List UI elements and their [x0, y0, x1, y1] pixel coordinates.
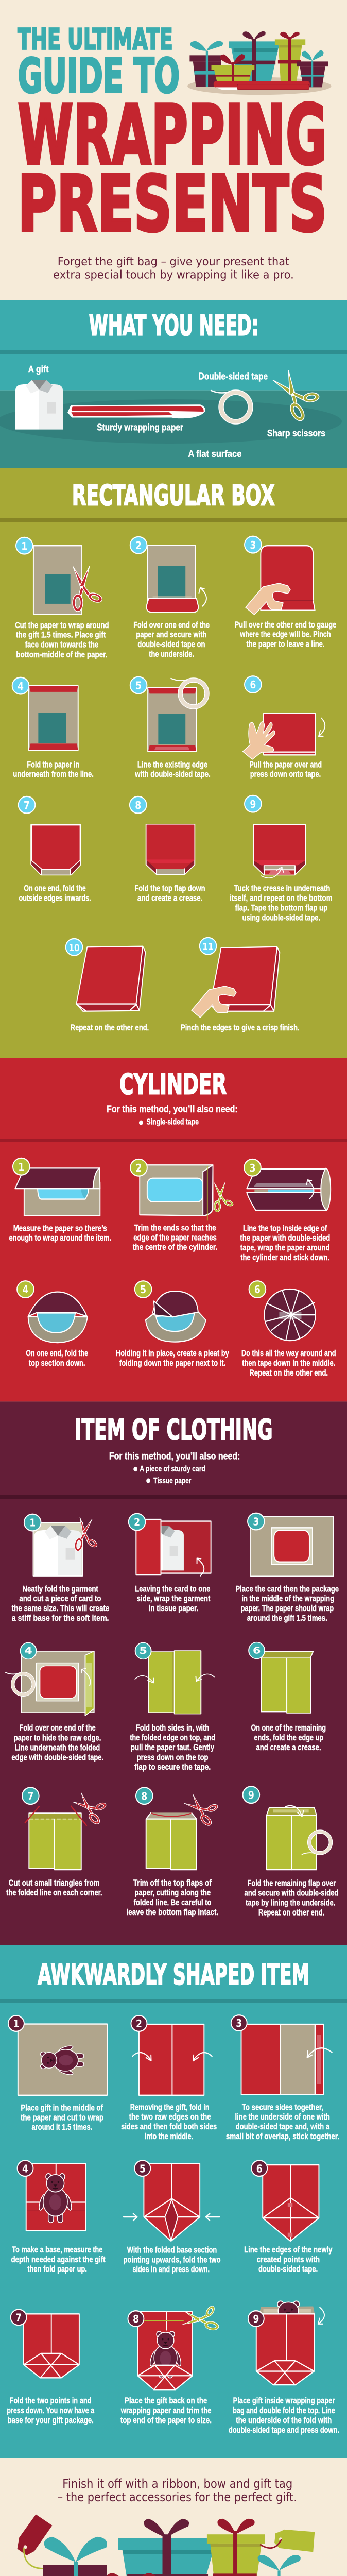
step 2: paper and secure with [136, 630, 206, 640]
closing text [58, 2476, 297, 2504]
step 4 [6, 1642, 103, 1762]
step 1: the same size. This will create [12, 1604, 109, 1613]
step 7: 7 [27, 1790, 33, 1803]
heading: item of clothing: A piece of sturdy card [140, 1464, 205, 1473]
labels: items needed: Sharp scissors [267, 428, 325, 439]
step 10 [66, 939, 149, 1032]
step 7: outside edges inwards. [19, 893, 91, 903]
intro text: extra special touch by wrapping it like a pro. [53, 268, 294, 281]
step 3: small bit of overlap, stick together. [226, 2132, 339, 2141]
step 6 [244, 2160, 333, 2274]
step 8: 8 [141, 1790, 147, 1803]
step 6: 6 [256, 2163, 263, 2175]
step 4: edge with double-sided tape. [11, 1753, 103, 1762]
step 5 [130, 677, 211, 779]
step 7: On one end, fold the [24, 884, 86, 893]
step 9: flap. Tape the bottom flap up [235, 903, 327, 913]
heading: item of clothing: ITEM OF CLOTHING [75, 1414, 273, 1447]
panel: awkwardly shaped item [0, 1945, 347, 2458]
heading: cylinder: For this method, you’ll also need: [107, 1104, 238, 1115]
step 3: Pull over the other end to gauge [235, 620, 336, 630]
heading: item of clothing [75, 1414, 273, 1485]
step 1: Place gift in the middle of [21, 2103, 103, 2113]
step 5: 5 [139, 1646, 147, 1656]
step 6 [249, 1642, 326, 1752]
step 6: 6 [254, 1284, 261, 1296]
step 1: 1 [21, 540, 27, 552]
step 1: 1 [13, 2018, 19, 2030]
step 2: 2 [134, 1516, 140, 1529]
step 1: Cut the paper to wrap around [15, 621, 109, 630]
step 3: 3 [250, 539, 256, 551]
icon: scissors [272, 363, 326, 423]
step 2: in tissue paper. [149, 1604, 198, 1613]
step 2: the two raw edges on the [129, 2112, 211, 2122]
icon: wrapping paper roll [67, 404, 205, 418]
step 6 [241, 1281, 336, 1378]
step 9: Place gift inside wrapping paper [233, 2396, 335, 2405]
step 4: depth needed against the gift [11, 2255, 106, 2264]
step 5: the folded edge on top, and [130, 1733, 215, 1742]
step 2: Removing the gift, fold in [130, 2103, 210, 2112]
step 2 [130, 1159, 234, 1252]
step 4: Fold the paper in [27, 760, 79, 770]
title: THE ULTIMATE [18, 22, 173, 56]
step 8: Place the gift back on the [125, 2396, 207, 2405]
step 2: Leaving the card to one [135, 1584, 210, 1594]
step 5: pointing upwards, fold the two [123, 2255, 221, 2265]
step 5: folding down the paper next to it. [119, 1359, 225, 1368]
step 7: press down. You now have a [7, 2406, 95, 2416]
step 3: 3 [249, 1162, 255, 1174]
icon: tape [211, 390, 253, 424]
step 3: paper. The paper should wrap [241, 1604, 334, 1613]
step 9: the underside of the fold with [236, 2416, 332, 2425]
step 3: in the middle of the wrapping [241, 1594, 334, 1603]
step 4: paper to hide the raw edge. [14, 1734, 101, 1743]
heading: rectangular box: RECTANGULAR BOX [72, 480, 275, 513]
step 8: top end of the paper to size. [120, 2416, 212, 2425]
step 1: Neatly fold the garment [22, 1584, 98, 1594]
step 10: Repeat on the other end. [71, 1023, 149, 1032]
step 3: the paper to leave a line. [246, 640, 325, 649]
step 3: To secure sides together, [242, 2103, 323, 2112]
step 7: Cut out small triangles from [9, 1878, 99, 1888]
step 1: face down towards the [25, 640, 98, 650]
step 2: sides and then fold both sides [121, 2122, 217, 2131]
step 6: Pull the paper over and [249, 760, 322, 770]
step 7: the folded line on each corner. [6, 1888, 102, 1897]
step 6: Line the edges of the newly [244, 2245, 333, 2255]
step 6: ends, fold the edge up [254, 1733, 323, 1742]
step 9: Tuck the crease in underneath [234, 884, 330, 893]
step 9: tape by lining the underside. [246, 1898, 335, 1908]
step 5: 5 [135, 680, 142, 692]
step 5: Line the existing edge [137, 760, 207, 770]
title: GUIDE TO [18, 49, 180, 104]
step 7: Fold the two points in and [9, 2396, 92, 2405]
step 3 [226, 2015, 339, 2141]
step 7 [19, 796, 91, 903]
step 8 [120, 2300, 222, 2425]
step 2: the centre of the cylinder. [133, 1243, 217, 1252]
heading: cylinder: CYLINDER [119, 1069, 227, 1101]
intro text [53, 255, 294, 281]
step 5 [116, 1281, 229, 1368]
step 3: Place the card then the package [235, 1584, 339, 1594]
step 9 [229, 2301, 339, 2435]
step 7: 7 [24, 800, 30, 811]
labels: items needed: Double-sided tape [199, 371, 268, 382]
step 5 [130, 1642, 215, 1772]
step 4: then fold paper up. [27, 2265, 87, 2274]
step 4: 4 [22, 1284, 28, 1296]
step 7 [6, 1786, 113, 1897]
illustration: gifts with tags [18, 2514, 316, 2576]
step 7 [7, 2310, 95, 2425]
step 8: 8 [135, 800, 141, 811]
panel: what you need [0, 300, 347, 468]
labels: items needed [28, 364, 325, 459]
labels: items needed: A gift [28, 364, 49, 375]
closing text: – the perfect accessories for the perfect gift. [58, 2489, 297, 2504]
labels: items needed: A flat surface [188, 449, 241, 459]
step 6: On one of the remaining [251, 1723, 326, 1733]
step 9: itself, and repeat on the bottom [230, 893, 333, 903]
step 4: 4 [18, 680, 24, 692]
step 1: 1 [29, 1517, 36, 1529]
step 5: pull the paper taut. Gently [131, 1743, 215, 1752]
step 8: folded line. Be careful to [134, 1898, 212, 1907]
panel: footer [18, 2476, 316, 2576]
step 4 [17, 1281, 88, 1368]
heading: cylinder: Single-sided tape [147, 1117, 199, 1126]
step 3: line the underside of one with [235, 2112, 330, 2122]
step 8 [130, 796, 205, 903]
step 2: Trim the ends so that the [134, 1223, 216, 1233]
step 5: Fold both sides in, with [136, 1723, 209, 1733]
step 1: a stiff base for the soft item. [12, 1614, 109, 1623]
step 3: the paper with double-sided [240, 1233, 330, 1243]
step 6: Repeat on the other end. [249, 1368, 328, 1378]
step 5: With the folded base section [127, 2245, 217, 2255]
step 6: 6 [250, 679, 256, 691]
step 1: and cut a piece of card to [19, 1594, 101, 1603]
step 4: 4 [24, 1646, 32, 1656]
step 11: 11 [202, 942, 214, 953]
step 1: Measure the paper so there’s [13, 1224, 107, 1233]
step 8: wrapping paper and trim the [120, 2406, 212, 2416]
step 3 [235, 1513, 339, 1623]
icon: shirt gift [15, 380, 63, 430]
step 8: Fold the top flap down [134, 884, 205, 893]
step 6: then tape down in the middle. [242, 1359, 335, 1368]
step 2 [121, 2015, 217, 2141]
panel: header [18, 22, 331, 281]
step 9: 9 [250, 798, 256, 810]
step 8: 8 [133, 2313, 139, 2326]
closing text: Finish it off with a ribbon, bow and gift tag [62, 2476, 292, 2491]
step 2: into the middle. [145, 2132, 193, 2141]
step 1 [9, 1158, 111, 1243]
step 4 [12, 677, 94, 779]
step 5: 5 [140, 2163, 146, 2175]
step 6: and create a crease. [256, 1743, 321, 1752]
step 4: Fold over one end of the [19, 1723, 96, 1733]
step 1: around it 1.5 times. [31, 2123, 92, 2132]
step 8: Trim off the top flaps of [133, 1878, 212, 1888]
heading: what you need: WHAT YOU NEED: [89, 310, 258, 342]
step 2: edge of the paper reaches [133, 1233, 217, 1243]
illustration: stack of gifts [187, 31, 331, 95]
step 4: 4 [22, 2163, 28, 2175]
step 3: double-sided tape and, with a [236, 2122, 330, 2131]
step 5: flap to secure the tape. [134, 1762, 211, 1772]
panel: rectangular box [0, 468, 347, 1058]
step 4: underneath from the line. [13, 770, 94, 779]
step 2: 2 [136, 2018, 142, 2030]
step 2: Fold over one end of the [133, 620, 210, 630]
step 3: Line the top inside edge of [243, 1224, 327, 1233]
step 9: using double-sided tape. [242, 913, 320, 923]
step 6: created points with [257, 2255, 320, 2264]
step 7: 7 [15, 2312, 22, 2324]
labels: items needed: Sturdy wrapping paper [97, 422, 184, 433]
intro text: Forget the gift bag – give your present that [58, 255, 290, 268]
step 4: To make a base, measure the [12, 2245, 102, 2255]
step 5: sides in and press down. [132, 2265, 210, 2275]
step 3 [240, 1159, 331, 1262]
heading: cylinder [107, 1069, 238, 1126]
step 7: base for your gift package. [8, 2416, 94, 2425]
step 9 [230, 795, 333, 923]
heading: item of clothing: For this method, you’ll also need: [109, 1450, 240, 1462]
step 4: Line underneath the folded [14, 1743, 100, 1753]
step 9: and secure with double-sided [245, 1889, 338, 1898]
heading: item of clothing: Tissue paper [153, 1476, 192, 1485]
step 3: 3 [236, 2018, 242, 2030]
step 3 [235, 536, 336, 649]
step 1 [8, 2015, 107, 2132]
step 1 [15, 537, 109, 659]
step 9: 9 [248, 1789, 254, 1802]
panel: cylinder [0, 1058, 347, 1401]
step 6: double-sided tape. [258, 2265, 318, 2274]
step 5: Holding it in place, create a pleat by [116, 1349, 229, 1358]
step 3: where the edge will be. Pinch [240, 630, 331, 639]
step 5: 5 [140, 1284, 146, 1296]
step 1: enough to wrap around the item. [9, 1233, 111, 1243]
step 4: On one end, fold the [26, 1349, 88, 1358]
step 5: with double-sided tape. [134, 770, 211, 779]
step 6: press down onto tape. [250, 770, 321, 779]
step 4: top section down. [29, 1359, 85, 1368]
step 11: Pinch the edges to give a crisp finish. [181, 1023, 300, 1032]
step 2: the underside. [149, 650, 194, 659]
step 1: the gift 1.5 times. Place gift [16, 631, 106, 640]
step 5 [123, 2160, 221, 2275]
step 3: the cylinder and stick down. [240, 1253, 329, 1262]
step 6: Do this all the way around and [241, 1349, 336, 1358]
step 11 [181, 938, 300, 1032]
step 2: 2 [135, 539, 142, 552]
title: PRESENTS [18, 160, 327, 249]
step 2 [130, 537, 210, 659]
step 9: Repeat on other end. [258, 1908, 324, 1918]
step 4 [11, 2160, 106, 2274]
panel: item of clothing [0, 1401, 347, 1945]
step 6: 6 [253, 1645, 261, 1656]
step 2 [129, 1514, 211, 1613]
step 8: leave the bottom flap intact. [126, 1908, 218, 1917]
step 3: tape, wrap the paper around [240, 1243, 329, 1252]
title [18, 22, 327, 249]
step 8: and create a crease. [137, 893, 202, 903]
step 2: double-sided tape on [137, 640, 205, 649]
step 5: press down on the top [137, 1753, 208, 1762]
step 8: paper, cutting along the [134, 1888, 211, 1897]
step 1: 1 [18, 1161, 24, 1173]
step 2: 2 [136, 1162, 142, 1174]
step 9: Fold the remaining flap over [248, 1879, 336, 1888]
step 9: 9 [253, 2313, 259, 2326]
step 1: the paper and cut to wrap [21, 2113, 103, 2123]
step 9: double-sided tape and press down. [229, 2426, 339, 2435]
step 3: around the gift 1.5 times. [247, 1614, 327, 1623]
step 9: bag and double fold the top. Line [233, 2406, 335, 2416]
step 1 [12, 1514, 109, 1623]
step 2: side, wrap the garment [137, 1594, 210, 1603]
step 8 [126, 1787, 224, 1917]
step 9 [243, 1786, 338, 1918]
step 3: 3 [253, 1516, 259, 1528]
step 10: 10 [68, 943, 80, 954]
step 6 [243, 676, 325, 779]
step 1: bottom-middle of the paper. [16, 650, 107, 659]
